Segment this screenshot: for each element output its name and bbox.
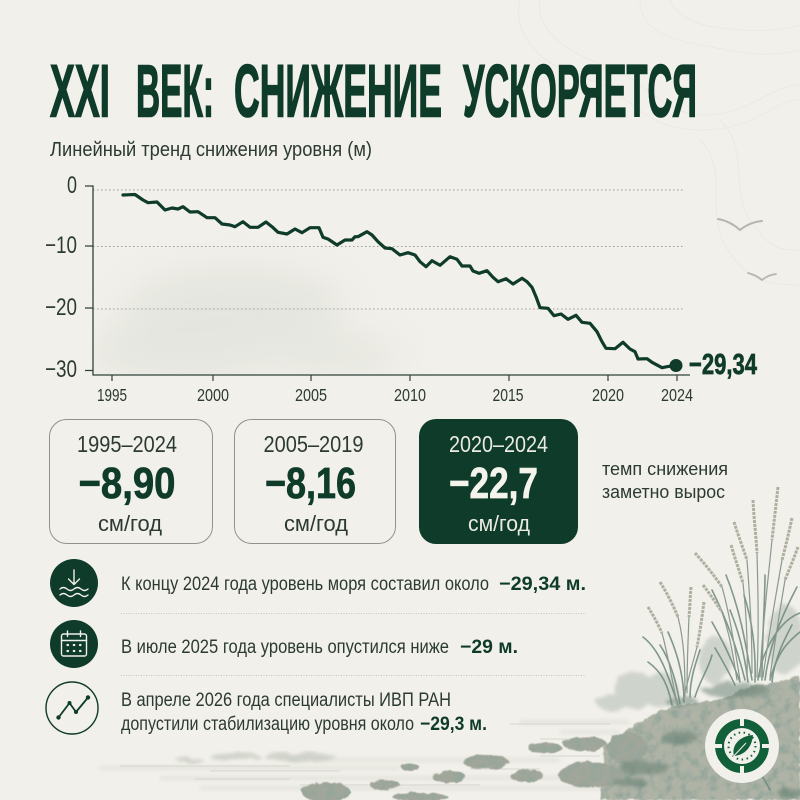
x axis labels: 2010 xyxy=(394,385,426,405)
text: end of 2024 level: −29,34 м. xyxy=(499,574,586,595)
panel: card 1995–2024 xyxy=(50,420,212,544)
water streaks xyxy=(100,722,640,788)
x axis labels: 2024 xyxy=(661,385,693,405)
text: end of 2024 level: К концу 2024 года уровень моря составил около xyxy=(121,574,489,595)
far shore rocks xyxy=(176,752,336,762)
icon: birds xyxy=(718,219,776,280)
callout: pace note: темп снижения xyxy=(602,459,728,479)
x axis labels: 2000 xyxy=(197,385,229,405)
dark moss xyxy=(614,683,800,797)
text: April 2026 forecast: −29,3 м. xyxy=(420,714,487,735)
title xyxy=(50,50,697,132)
panel: card 1995–2024: см/год xyxy=(98,511,162,536)
icon: trend line xyxy=(46,682,98,734)
hill xyxy=(600,677,800,800)
y axis labels: 0 xyxy=(67,172,77,199)
x axis labels: 2020 xyxy=(592,385,624,405)
callout: pace note: заметно вырос xyxy=(602,482,725,502)
distant shrubs xyxy=(596,604,800,710)
rocks xyxy=(302,732,647,800)
end point marker xyxy=(670,359,682,372)
panel: card 2020–2024 highlighted: см/год xyxy=(468,511,530,536)
panel: card 2020–2024 highlighted: −22,7 xyxy=(449,459,538,508)
y axis labels: −30 xyxy=(45,356,77,383)
icon: calendar xyxy=(50,620,98,668)
panel: card 1995–2024: 1995–2024 xyxy=(77,431,177,457)
title: ВЕК: xyxy=(136,50,214,132)
x axis labels: 2005 xyxy=(295,385,327,405)
data line xyxy=(123,194,676,368)
x axis labels xyxy=(97,385,693,405)
y axis labels: −20 xyxy=(45,294,77,321)
panel: card 2005–2019: −8,16 xyxy=(265,459,356,508)
panel: card 2020–2024 highlighted xyxy=(419,419,578,544)
panel: card 2005–2019: 2005–2019 xyxy=(264,431,364,457)
grass blades xyxy=(643,575,800,790)
panel: card 1995–2024: −8,90 xyxy=(78,459,176,508)
illustration: shore with rocks and grass xyxy=(100,487,800,800)
panel: card 2020–2024 highlighted: 2020–2024 xyxy=(449,431,548,457)
logo: compass leaf badge xyxy=(705,709,779,783)
line chart: sea level trend xyxy=(45,172,757,405)
chart subtitle: Линейный тренд снижения уровня (м) xyxy=(50,139,372,161)
panel: card 2005–2019: см/год xyxy=(284,511,348,536)
y axis labels xyxy=(45,172,77,383)
callout: pace note xyxy=(602,459,728,502)
grass stems xyxy=(662,540,785,703)
text: April 2026 forecast: В апреле 2026 года специалисты ИВП РАН xyxy=(121,690,451,711)
title: СНИЖЕНИЕ xyxy=(234,50,442,132)
end value label: −29,34 xyxy=(689,349,757,381)
y axis labels: −10 xyxy=(45,232,77,259)
x axis labels: 1995 xyxy=(97,385,127,405)
icon: water level down xyxy=(50,559,98,607)
grass spikes xyxy=(648,487,798,647)
panel: card 2005–2019 xyxy=(234,420,396,544)
text: July 2025 level: −29 м. xyxy=(460,637,518,658)
x axis labels: 2015 xyxy=(492,385,524,405)
text: July 2025 level: В июле 2025 года уровень опустился ниже xyxy=(121,637,449,658)
text: April 2026 forecast xyxy=(121,690,487,735)
title: XXI xyxy=(50,50,110,132)
text: April 2026 forecast: допустили стабилизацию уровня около xyxy=(121,714,414,735)
